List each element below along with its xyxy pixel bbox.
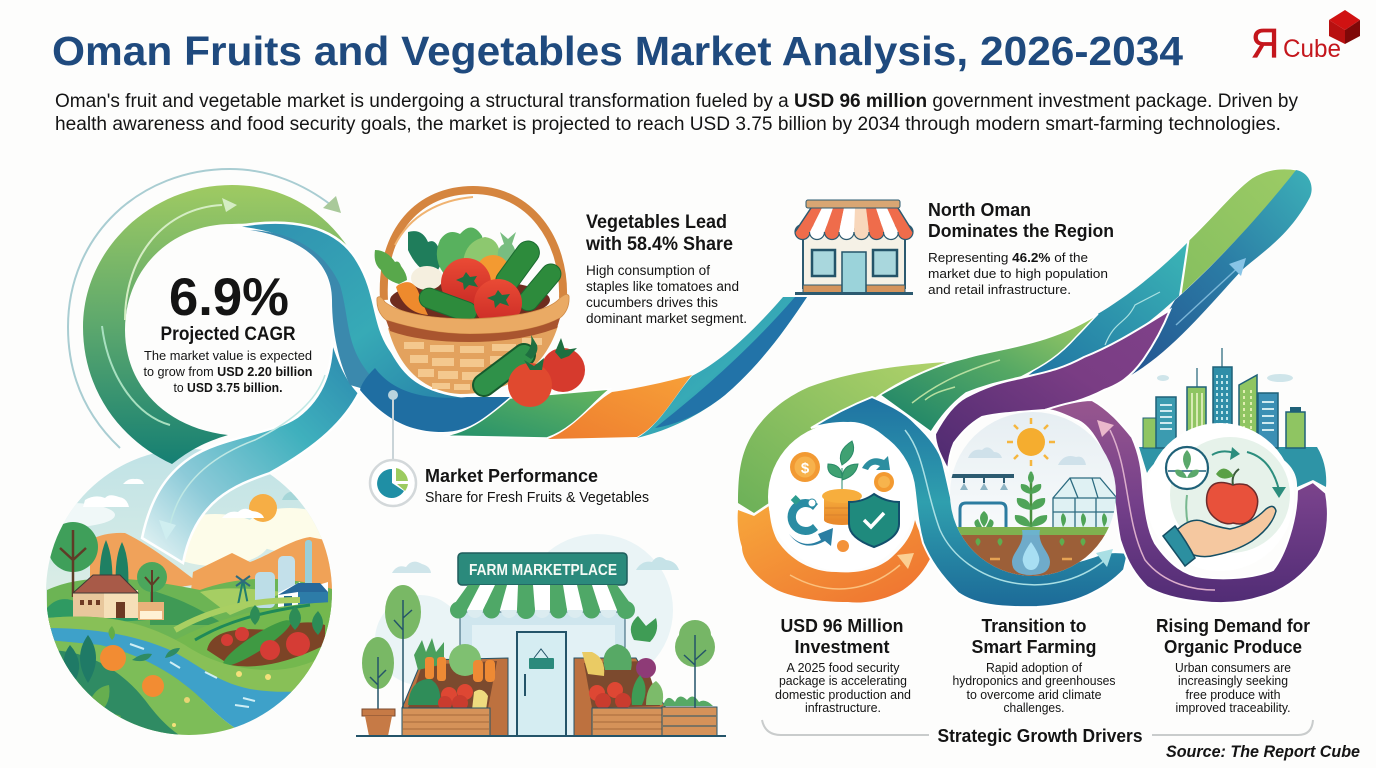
body: package is accelerating [779,674,907,688]
heading: Vegetables Lead [586,212,727,233]
body: free produce with [1186,688,1281,702]
teal ribbon under the basket [233,223,510,432]
illustration: farm landscape circle [46,449,332,735]
logo: RCube [1251,10,1360,66]
icon: investment: $ [801,460,810,477]
ribbon segments: green and orange, continuing to the store [443,297,807,439]
sign: FARM MARKETPLACE [469,562,617,579]
driver column: Organic Produce [1156,615,1310,715]
re-mask circle over the skyline base [1146,423,1294,571]
body text: staples like tomatoes and [586,279,739,294]
body: hydroponics and greenhouses [952,674,1116,688]
heading [1156,615,1310,657]
stat description: to USD 3.75 billion. [174,380,282,395]
icon: investment [788,441,899,552]
ribbon: top right green [1181,169,1297,295]
bracket and section label: strategic growth drivers: Strategic Growth Drivers [938,725,1142,746]
body text: and retail infrastructure. [928,282,1071,297]
body text [928,250,1108,297]
illustration: farm marketplace [356,534,726,737]
driver column: USD 96 Million [775,615,911,715]
body [952,661,1116,715]
body: infrastructure. [805,701,881,715]
heading: Transition to [982,615,1086,636]
body [775,661,911,715]
logo: RCube: Cube [1283,35,1341,63]
driver column: Smart Farming [952,615,1116,715]
body text: dominant market segment. [586,311,747,326]
store building [460,612,625,736]
sign [458,553,627,585]
body: Urban consumers are [1175,661,1291,675]
awning [450,585,635,619]
icon: organic apple in hand [1163,437,1290,566]
body: challenges. [1004,701,1064,715]
stat description [144,348,313,395]
ribbon: teal band near city [1139,445,1326,487]
big stat 6.9%: 6.9% [169,268,289,327]
green ring around CAGR [83,185,357,464]
stat label: Projected CAGR [160,324,296,345]
ribbon: top right blue [1118,170,1312,382]
body: improved traceability. [1176,701,1290,715]
heading [972,615,1096,657]
source note: Source: The Report Cube [1166,743,1360,761]
body: Rapid adoption of [986,661,1083,675]
body: A 2025 food security [786,661,900,675]
callout: market performance: Share for Fresh Fruits & Vegetables [425,490,649,506]
bracket and section label: strategic growth drivers [762,720,1313,746]
callout: market performance: Market Performance [425,465,598,486]
ribbon: mid teal [1025,243,1187,378]
white circles for the three drivers [768,412,1294,576]
ribbon: purple band [935,310,1170,470]
icon: vegetable basket [375,190,585,407]
title: Oman Fruits and Vegetables Market Analysis, 2026-2034 [52,28,1183,74]
intro paragraph: health awareness and food security goals, the market is projected to reach USD 3.75 billion by 2034 through modern smart-farming technologies. [55,114,1281,135]
ribbon: teal arc around smart farming [811,397,1128,607]
heading [780,615,904,657]
trees and pot [362,585,715,736]
ribbon: light green arc [738,362,946,513]
lower ribbon flowing to the landscape [142,340,359,563]
heading: Organic Produce [1164,636,1302,657]
right vegetable crate [574,616,717,736]
heading [585,212,733,255]
body text: High consumption of [586,263,710,278]
ribbon: dark green [880,314,1098,432]
heading: Smart Farming [972,636,1096,657]
body text: market due to high population [928,266,1108,281]
body: increasingly seeking [1178,674,1288,688]
body text: Representing 46.2% of the [928,250,1088,265]
icon: storefront, North Oman [795,200,913,295]
body: domestic production and [775,688,911,702]
stat description: The market value is expected [144,348,312,363]
ribbon: purple arc [1045,400,1328,603]
intro paragraph: Oman's fruit and vegetable market is undergoing a structural transformation fueled by a USD 96 million government investment package. Driven by [55,91,1298,112]
right ribbon network [738,169,1328,607]
body [1175,661,1291,715]
left vegetable crate [402,638,508,736]
heading: USD 96 Million [780,615,904,636]
heading: Dominates the Region [928,220,1114,241]
illustration: city skyline [1143,348,1305,448]
stat description: to grow from USD 2.20 billion [144,364,313,379]
icon: smart farming [950,418,1116,580]
logo: RCube: Я [1251,20,1279,66]
callout: North Oman [928,199,1114,297]
intro paragraph [55,91,1298,135]
background haze [375,534,673,736]
callout: market performance [425,465,649,506]
heading: Rising Demand for [1156,615,1310,636]
connector line to market performance [388,390,398,462]
thin outer cycle arrow [68,169,341,448]
body text: cucumbers drives this [586,295,718,310]
heading: North Oman [928,199,1031,220]
icon: pie chart [370,460,416,506]
CAGR panel [144,268,313,395]
heading: with 58.4% Share [585,234,733,255]
body text [586,263,747,326]
ribbon: orange arc [738,506,933,602]
callout: vegetables share [585,212,747,326]
heading [928,199,1114,241]
heading: Investment [794,636,890,657]
body: to overcome arid climate [966,688,1102,702]
